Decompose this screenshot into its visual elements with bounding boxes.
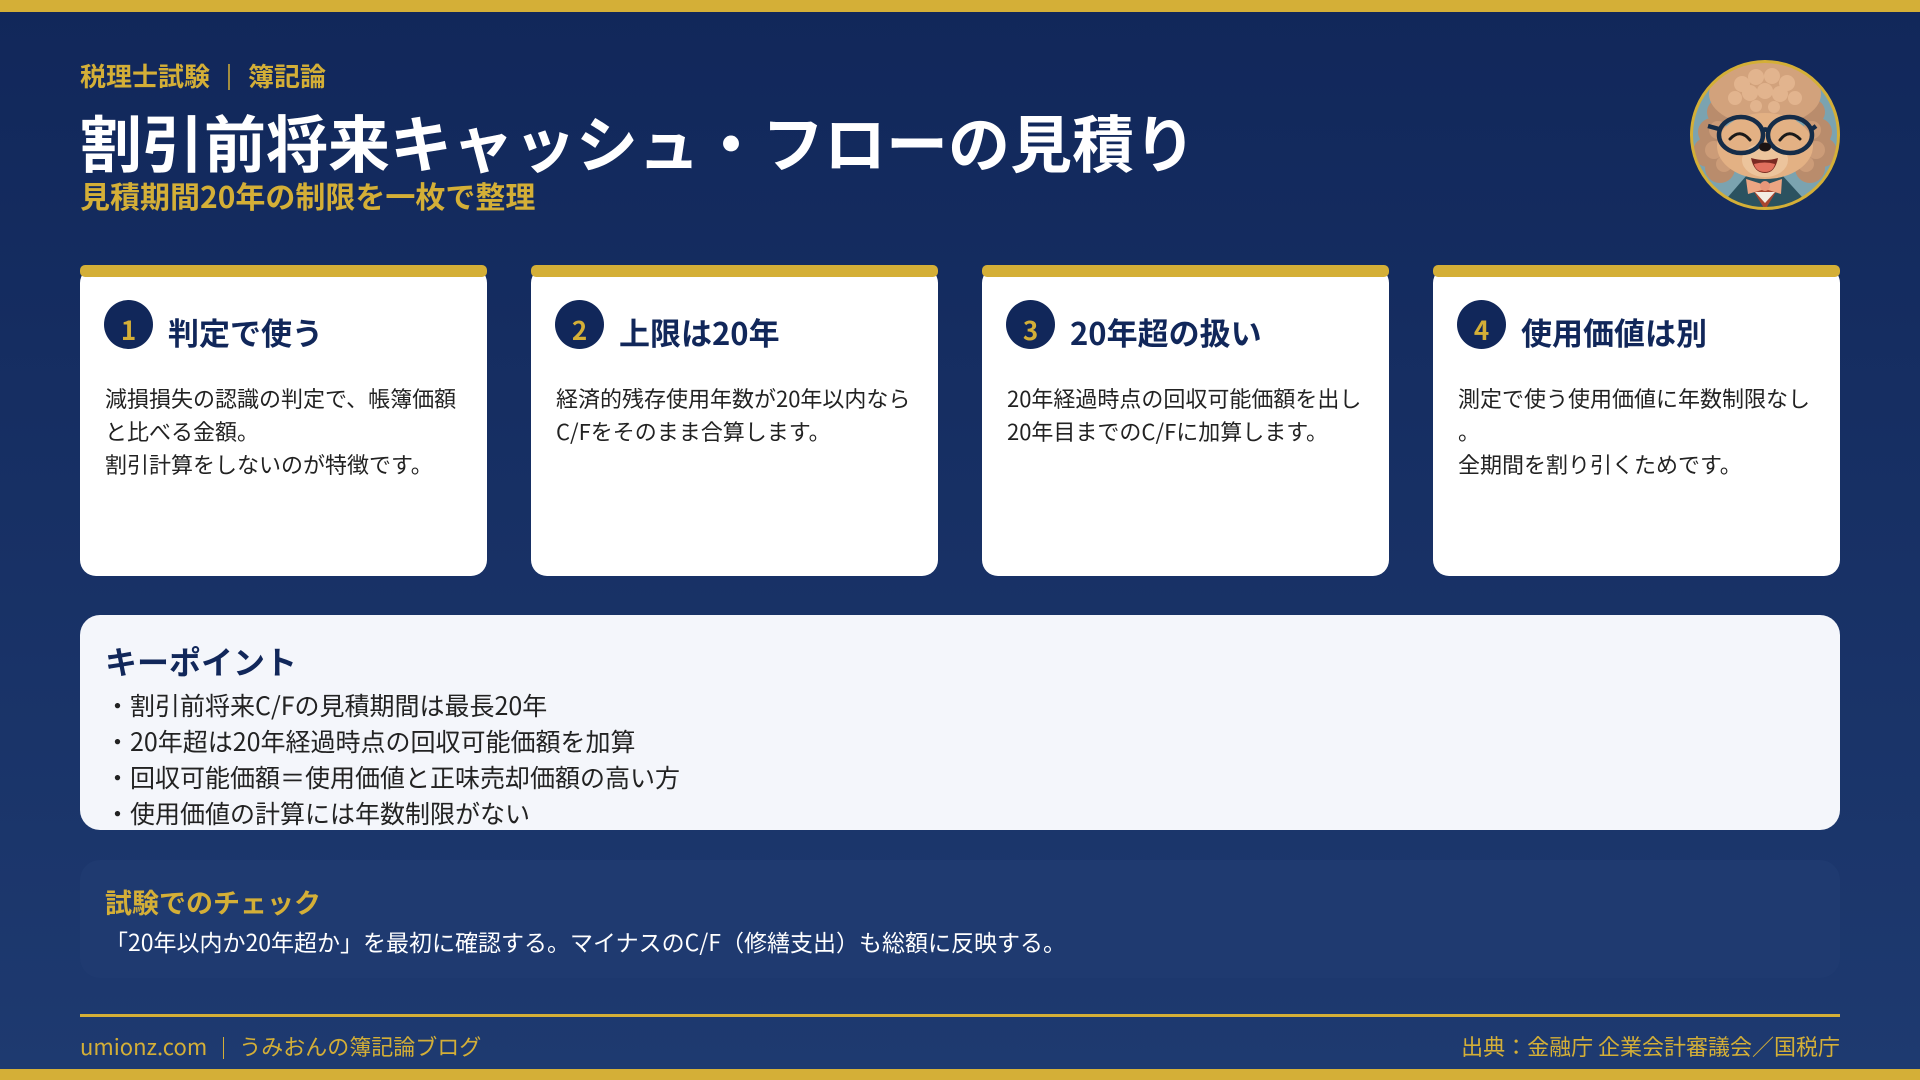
panel: card 1 判定で使う	[80, 265, 487, 576]
number badge 3	[1006, 300, 1055, 349]
card 4 body	[1458, 382, 1810, 480]
card 4 body: 。	[1458, 415, 1480, 447]
key points bullet list: ・割引前将来C/Fの見積期間は最長20年	[105, 687, 547, 723]
card 4 heading: 使用価値は別	[1521, 309, 1707, 354]
hair cap	[1709, 62, 1821, 126]
number badge 1	[104, 300, 153, 349]
number badge 3: 3	[1023, 311, 1038, 348]
card 2 body: C/Fをそのまま合算します。	[556, 415, 831, 447]
card 1 heading: 判定で使う	[168, 309, 323, 354]
number badge 4	[1457, 300, 1506, 349]
number badge 4: 4	[1474, 311, 1489, 348]
jacket	[1728, 176, 1802, 207]
card 2 body: 経済的残存使用年数が20年以内なら	[556, 382, 910, 414]
subtitle: 見積期間20年の制限を一枚で整理	[80, 173, 535, 217]
icon: poodle mascot avatar	[1690, 60, 1840, 210]
number badge 2: 2	[572, 311, 587, 348]
number badge 1: 1	[121, 311, 136, 348]
eyebrow: exam and subject: 税理士試験 簿記論	[80, 57, 326, 94]
footer left: site name: umionz.com うみおんの簿記論ブログ	[80, 1030, 481, 1062]
eyes	[1730, 134, 1800, 140]
card 3 body	[1007, 382, 1361, 447]
card 1 body: と比べる金額。	[105, 415, 259, 447]
footer right: source: 出典：金融庁 企業会計審議会／国税庁	[1461, 1030, 1840, 1062]
key points bullet list: ・回収可能価額＝使用価値と正味売却価額の高い方	[105, 759, 680, 795]
card 4 body: 測定で使う使用価値に年数制限なし	[1458, 382, 1810, 414]
panel: key points	[80, 615, 1840, 830]
title: 割引前将来キャッシュ・フローの見積り	[80, 95, 1196, 185]
bottom gold bar	[0, 1069, 1920, 1080]
card 2 body	[556, 382, 910, 447]
card 1 body	[105, 382, 456, 480]
nose	[1759, 142, 1771, 152]
card 3 body: 20年目までのC/Fに加算します。	[1007, 415, 1328, 447]
key points heading: キーポイント	[105, 638, 297, 684]
exam check heading: 試験でのチェック	[105, 882, 321, 921]
bow tie	[1746, 179, 1782, 194]
card 4 body: 全期間を割り引くためです。	[1458, 448, 1742, 480]
mouth	[1751, 158, 1778, 173]
key points bullet list	[105, 687, 680, 830]
number badge 2	[555, 300, 604, 349]
key points bullet list: ・20年超は20年経過時点の回収可能価額を加算	[105, 723, 636, 759]
footer rule	[80, 1014, 1840, 1017]
top gold bar	[0, 0, 1920, 12]
card 1 body: 減損損失の認識の判定で、帳簿価額	[105, 382, 456, 414]
face	[1717, 113, 1813, 179]
exam check text: 「20年以内か20年超か」を最初に確認する。マイナスのC/F（修繕支出）も総額に反映する。	[105, 924, 1066, 958]
card 3 body: 20年経過時点の回収可能価額を出し	[1007, 382, 1361, 414]
key points bullet list: ・使用価値の計算には年数制限がない	[105, 795, 530, 830]
card 3 heading: 20年超の扱い	[1070, 309, 1262, 354]
glasses	[1708, 117, 1816, 153]
panel: card 3 20年超の扱い	[982, 265, 1389, 576]
panel: card 2 上限は20年	[531, 265, 938, 576]
panel: exam check	[80, 860, 1840, 978]
card 2 heading: 上限は20年	[619, 309, 780, 354]
panel: card 4 使用価値は別	[1433, 265, 1840, 576]
side curls	[1693, 99, 1837, 183]
card 1 body: 割引計算をしないのが特徴です。	[105, 448, 433, 480]
